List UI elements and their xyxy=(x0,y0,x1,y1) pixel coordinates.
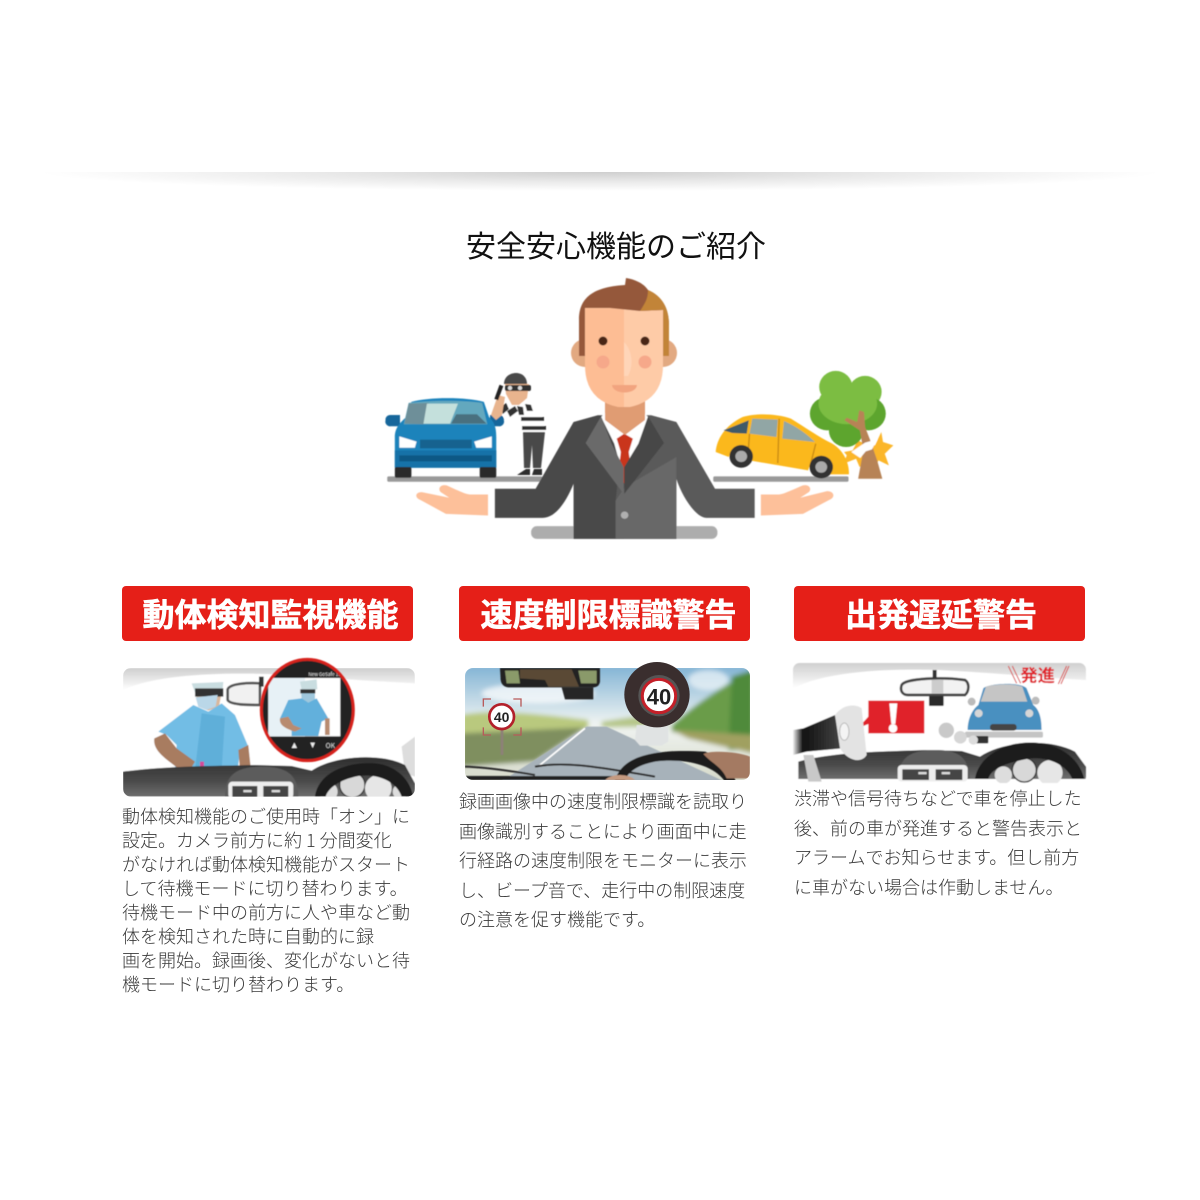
road xyxy=(498,727,728,783)
text: motion detection description: して待機モードに切り替わります。 xyxy=(122,875,408,901)
right hand xyxy=(761,485,833,515)
title: 安全安心機能のご紹介 xyxy=(466,222,766,266)
inset camera screen xyxy=(258,659,358,761)
small speed sign 40: 40 xyxy=(494,709,510,725)
illustration: businessman with car risks xyxy=(385,278,893,539)
rear mirror xyxy=(500,668,600,687)
left hand xyxy=(416,485,488,515)
text: motion detection description: 画を開始。録画後、変化がないと待 xyxy=(122,947,410,973)
text: departure warning description: に車がない場合は作動しません。 xyxy=(794,874,1063,900)
small speed sign 40 xyxy=(483,699,521,735)
text: departure warning description xyxy=(794,785,1082,900)
text: speed sign description: 画像識別することにより画面中に走 xyxy=(459,818,747,844)
wipers xyxy=(465,764,655,777)
large speed sign 40 xyxy=(624,662,690,727)
departure label: 発進 xyxy=(1020,661,1055,686)
suit xyxy=(495,412,755,539)
tree xyxy=(810,371,893,479)
photo: motion detection xyxy=(123,659,415,802)
front car xyxy=(635,725,668,746)
text: motion detection description: 機モードに切り替わります。 xyxy=(122,971,354,997)
rear mirror xyxy=(901,678,968,695)
departure label xyxy=(1008,661,1069,686)
text: departure warning description: 後、前の車が発進すると警告表示と xyxy=(794,815,1082,841)
banner: departure delay warning: 出発遅延警告 xyxy=(845,590,1037,636)
thief xyxy=(491,373,546,475)
dashboard xyxy=(123,757,415,797)
road right xyxy=(713,476,849,482)
text: departure warning description: 渋滞や信号待ちなどで車を停止した xyxy=(794,785,1082,811)
text: motion detection description: 設定。カメラ前方に約 1 分間変化 xyxy=(122,827,392,853)
text: speed sign description: 録画画像中の速度制限標識を読取り xyxy=(459,788,747,814)
text: motion detection description: がなければ動体検知機能がスタート xyxy=(122,851,410,877)
road left xyxy=(387,476,542,482)
sign post xyxy=(501,727,503,755)
text: speed sign description: の注意を促す機能です。 xyxy=(459,906,655,932)
text: motion detection description: 動体検知機能のご使用時「オン」に xyxy=(122,803,410,829)
steering wheel xyxy=(615,751,736,781)
text: speed sign description xyxy=(459,788,747,932)
text: motion detection description xyxy=(122,803,410,997)
base bar xyxy=(531,526,717,539)
dashboard xyxy=(798,743,1086,779)
photo: speed sign xyxy=(462,662,753,783)
exhaust smoke xyxy=(939,723,954,738)
blue front car xyxy=(968,684,1042,730)
megaphone xyxy=(793,705,867,782)
photo: departure warning xyxy=(793,661,1086,785)
banner: departure delay warning xyxy=(794,586,1085,641)
top shadow band xyxy=(144,172,1056,188)
banner: motion detection: 動体検知監視機能 xyxy=(142,590,399,636)
trees xyxy=(462,712,588,737)
text: departure warning description: アラームでお知らせます。但し前方 xyxy=(794,844,1079,870)
text: motion detection description: 待機モード中の前方に人や車など動 xyxy=(122,899,410,925)
yellow car xyxy=(716,414,849,478)
text: speed sign description: し、ビープ音で、走行中の制限速度 xyxy=(459,877,745,903)
banner: speed sign warning: 速度制限標識警告 xyxy=(480,590,737,636)
person xyxy=(192,682,223,693)
businessman head xyxy=(571,278,677,435)
inset camera screen: OK xyxy=(326,740,336,750)
large speed sign 40: 40 xyxy=(647,684,671,709)
text: speed sign description: 行経路の速度制限をモニターに表示 xyxy=(459,847,747,873)
blue car xyxy=(385,398,504,478)
mirror xyxy=(228,683,260,705)
text: motion detection description: 体を検知された時に自動的に録 xyxy=(122,923,374,949)
inset camera screen: New GoSafe 110 xyxy=(308,671,344,678)
alert bubble xyxy=(858,701,924,733)
grass xyxy=(462,727,587,767)
